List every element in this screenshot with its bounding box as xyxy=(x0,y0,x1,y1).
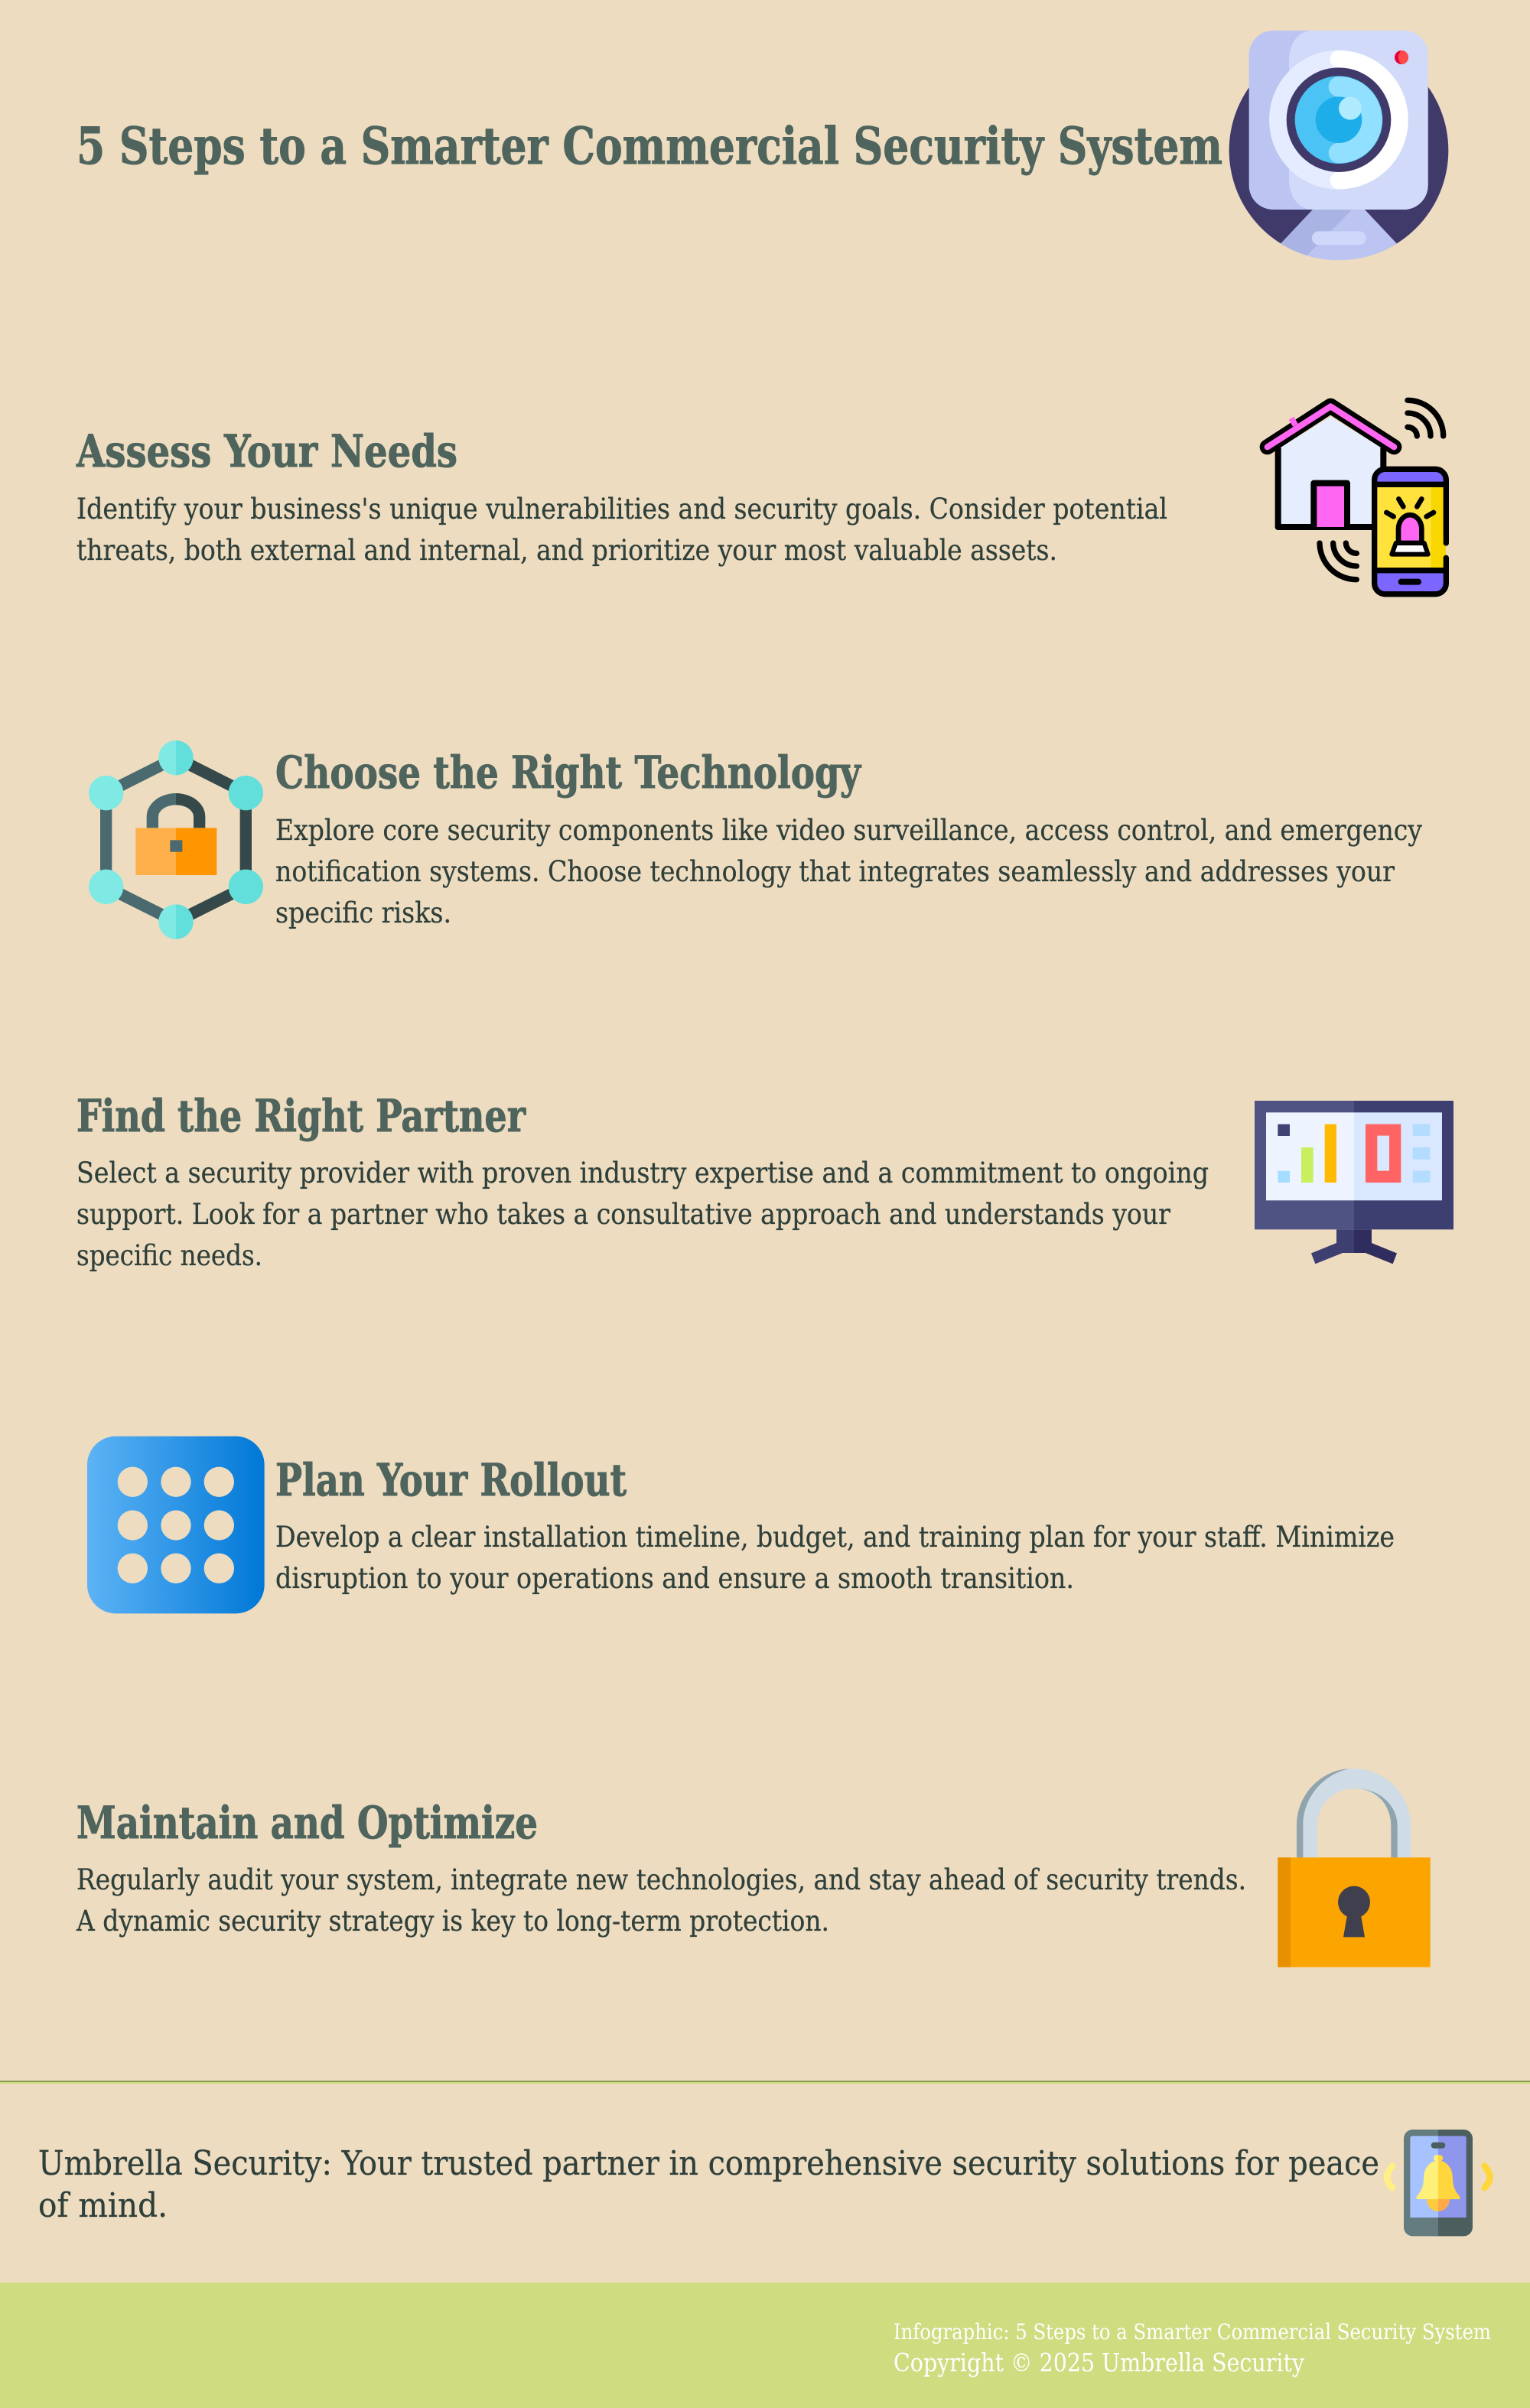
text block: Develop a clear installation timeline, budget, and training plan for your staff. Minimize xyxy=(275,1521,1395,1554)
text block xyxy=(76,493,1167,567)
icon: phone bell xyxy=(1387,2130,1490,2236)
callout text xyxy=(38,2144,1379,2225)
text block xyxy=(76,1863,1246,1938)
text block: Identify your business's unique vulnerabilities and security goals. Consider potential xyxy=(76,493,1167,526)
step 4: plan your rollout xyxy=(87,1437,1395,1613)
text block: specific risks. xyxy=(275,896,451,929)
footer bar xyxy=(0,2283,1530,2408)
footer text: Infographic: 5 Steps to a Smarter Commercial Security System xyxy=(894,2319,1491,2345)
title: 5 Steps to a Smarter Commercial Security System xyxy=(76,116,1222,176)
heading: Choose the Right Technology xyxy=(275,747,861,799)
header panel xyxy=(76,31,1448,260)
text block: threats, both external and internal, and prioritize your most valuable assets. xyxy=(76,534,1057,567)
heading: Assess Your Needs xyxy=(76,425,457,477)
heading: Plan Your Rollout xyxy=(275,1454,627,1506)
callout text: Umbrella Security: Your trusted partner in comprehensive security solutions for peace xyxy=(38,2144,1379,2183)
icon: security camera xyxy=(1229,31,1448,260)
step 5: maintain and optimize xyxy=(76,1769,1431,1967)
step 2: choose the right technology xyxy=(89,740,1422,939)
heading: Maintain and Optimize xyxy=(76,1797,538,1849)
icon: network lock xyxy=(89,740,263,939)
icon: smart home alarm xyxy=(1268,400,1446,594)
callout text: of mind. xyxy=(38,2186,168,2225)
text block: A dynamic security strategy is key to long-term protection. xyxy=(76,1905,829,1938)
text block: support. Look for a partner who takes a consultative approach and understands your xyxy=(76,1198,1170,1231)
icon: dashboard monitor xyxy=(1255,1101,1454,1264)
callout: umbrella security xyxy=(38,2130,1490,2236)
footer text: Copyright © 2025 Umbrella Security xyxy=(894,2348,1304,2377)
text block: Explore core security components like video surveillance, access control, and emergency xyxy=(275,814,1422,847)
text block xyxy=(275,814,1422,929)
text block: specific needs. xyxy=(76,1239,262,1272)
text block: disruption to your operations and ensure a smooth transition. xyxy=(275,1562,1074,1595)
text block: notification systems. Choose technology that integrates seamlessly and addresses your xyxy=(275,855,1395,888)
icon: padlock xyxy=(1278,1769,1431,1967)
text block: Regularly audit your system, integrate new technologies, and stay ahead of security trends. xyxy=(76,1863,1246,1896)
footer text xyxy=(894,2319,1491,2377)
icon: keypad xyxy=(87,1437,265,1613)
heading: Find the Right Partner xyxy=(76,1090,526,1142)
text block xyxy=(76,1157,1209,1272)
text block xyxy=(275,1521,1395,1595)
step 3: find the right partner xyxy=(76,1090,1454,1272)
text block: Select a security provider with proven industry expertise and a commitment to ongoing xyxy=(76,1157,1209,1189)
step 1: assess your needs xyxy=(76,400,1446,594)
